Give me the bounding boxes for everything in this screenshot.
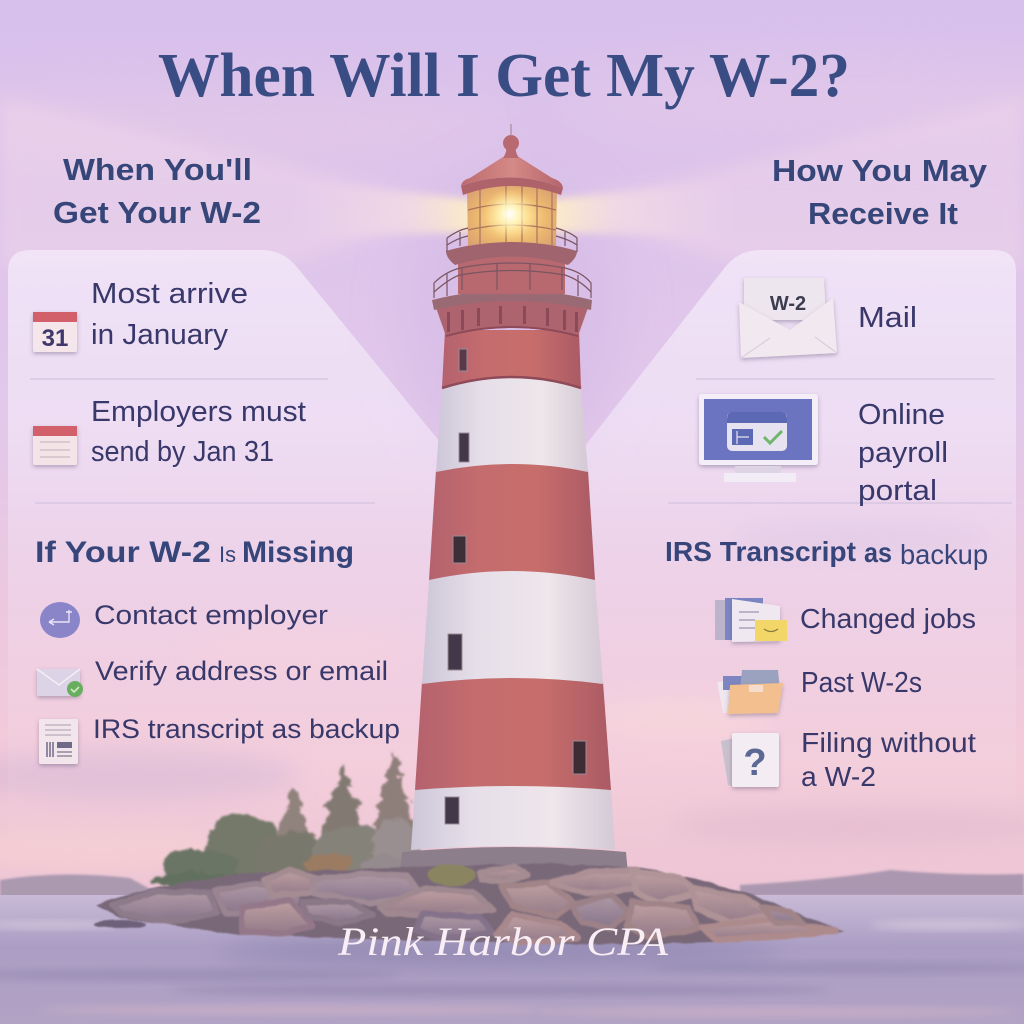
icon: folder [717, 670, 783, 714]
item: online payroll portal [699, 394, 948, 507]
text: filing without a W-2: Filing without [801, 727, 976, 758]
tower bands [411, 330, 615, 850]
text: employers must send by Jan 31: send by Jan 31 [91, 436, 274, 468]
text: employers must send by Jan 31: Employers must [91, 396, 306, 428]
item: mail [739, 278, 917, 358]
heading: when you'll get your W-2: When You'll [63, 152, 252, 187]
item: past W-2s [717, 667, 922, 714]
heading: if your W-2 is missing: Missing [242, 536, 354, 569]
heading: if your W-2 is missing: If Your W-2 [35, 536, 211, 569]
icon: question page [721, 733, 779, 787]
corbels and lower deck [432, 290, 592, 336]
item: most arrive in January [33, 278, 248, 352]
heading: IRS transcript as backup: IRS Transcript [665, 536, 856, 567]
text: verify address or email: Verify address or email [95, 656, 388, 686]
roof [461, 124, 563, 195]
heading: how you may receive it: How You May [772, 153, 988, 188]
heading: IRS transcript as backup [665, 536, 988, 570]
text: most arrive in January: Most arrive [91, 278, 248, 310]
text: contact employer: Contact employer [94, 600, 328, 630]
text: online payroll portal: payroll [858, 437, 948, 469]
icon: W-2 envelope [739, 278, 837, 358]
heading: when you'll get your W-2: Get Your W-2 [53, 195, 261, 230]
heading: how you may receive it [772, 153, 988, 231]
heading: if your W-2 is missing [35, 536, 354, 569]
lower railing [434, 263, 591, 298]
text: filing without a W-2: a W-2 [801, 761, 876, 792]
item: employers must send by Jan 31 [33, 396, 306, 468]
water [0, 895, 1024, 1024]
icon: documents with envelope [715, 598, 787, 642]
text: online payroll portal: Online [858, 399, 945, 431]
text: most arrive in January: in January [91, 319, 228, 351]
middle tier [458, 252, 565, 294]
brand: Pink Harbor CPA: Pink Harbor CPA [337, 919, 669, 964]
text: filing without a W-2 [801, 727, 976, 792]
icon: monitor [699, 394, 818, 482]
item: IRS transcript as backup [39, 714, 400, 764]
icon: calendar 31: 31 [42, 325, 68, 352]
text: online payroll portal: portal [858, 475, 937, 507]
item: changed jobs [715, 598, 976, 642]
lighthouse base [400, 847, 628, 874]
rocky island [94, 864, 845, 945]
icon: phone bubble [40, 602, 80, 638]
trees [151, 752, 418, 887]
title: When Will I Get My W-2? [158, 42, 850, 110]
text: employers must send by Jan 31 [91, 396, 306, 468]
icon: question page: ? [743, 742, 767, 784]
icon: W-2 envelope: W-2 [770, 293, 806, 315]
heading: IRS transcript as backup: backup [900, 539, 988, 570]
light beams [0, 95, 1024, 270]
distant hills [0, 870, 1024, 900]
text: online payroll portal [858, 399, 948, 507]
item: verify address or email [37, 656, 388, 697]
heading: when you'll get your W-2 [53, 152, 261, 230]
windows [445, 349, 586, 824]
item: filing without a W-2 [721, 727, 976, 792]
upper deck [446, 242, 577, 265]
text: past W-2s: Past W-2s [801, 667, 922, 699]
text: IRS transcript as backup: IRS transcript as backup [93, 714, 400, 744]
text: changed jobs: Changed jobs [800, 603, 976, 634]
item: contact employer [40, 600, 328, 638]
text: mail: Mail [858, 302, 917, 334]
upper railing [447, 228, 577, 252]
heading: IRS transcript as backup: as [864, 537, 892, 568]
panel: how you may receive it [550, 250, 1016, 860]
divider lines [30, 379, 1012, 503]
panel: when you'll get your W-2 [8, 250, 480, 860]
text: most arrive in January [91, 278, 248, 351]
icon: envelope with check [37, 669, 83, 697]
icon: calendar lined [33, 426, 77, 465]
icon: calendar 31 [33, 312, 77, 352]
icon: transcript document [39, 719, 78, 764]
lighthouse [400, 124, 628, 874]
heading: if your W-2 is missing: Is [219, 542, 236, 567]
lantern room [467, 182, 557, 246]
heading: how you may receive it: Receive It [808, 196, 958, 231]
